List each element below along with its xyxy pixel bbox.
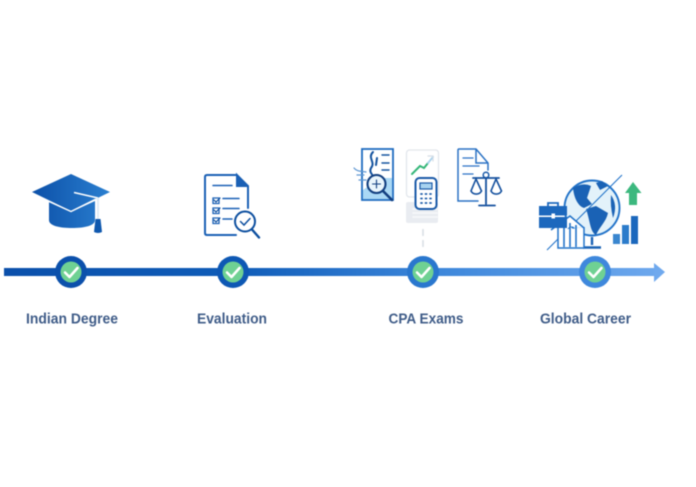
icon: briefcase [539,203,567,228]
icon: globe with briefcase and growth chart [539,175,642,250]
node: CPA Exams check [407,256,439,288]
node: Evaluation check [217,256,249,288]
label: CPA Exams: CPA Exams [388,312,464,328]
icon: rising bars [613,216,638,244]
icon: graduation cap [32,174,110,233]
icon: audit document with magnifier [354,149,393,200]
icon: evaluation checklist document [205,175,259,238]
label: Indian Degree: Indian Degree [26,312,118,328]
node: Global Career check [579,256,611,288]
timeline arrow [4,263,665,282]
icon: legal document with scales [458,149,502,206]
node: Indian Degree check [55,256,87,288]
icon: green up arrow [625,182,642,205]
connector: dashed line [422,229,424,250]
label: Evaluation: Evaluation [197,312,267,328]
icon: bar chart building [551,216,584,248]
label: Global Career: Global Career [540,312,631,328]
icon: calculator and trend card [406,150,438,223]
